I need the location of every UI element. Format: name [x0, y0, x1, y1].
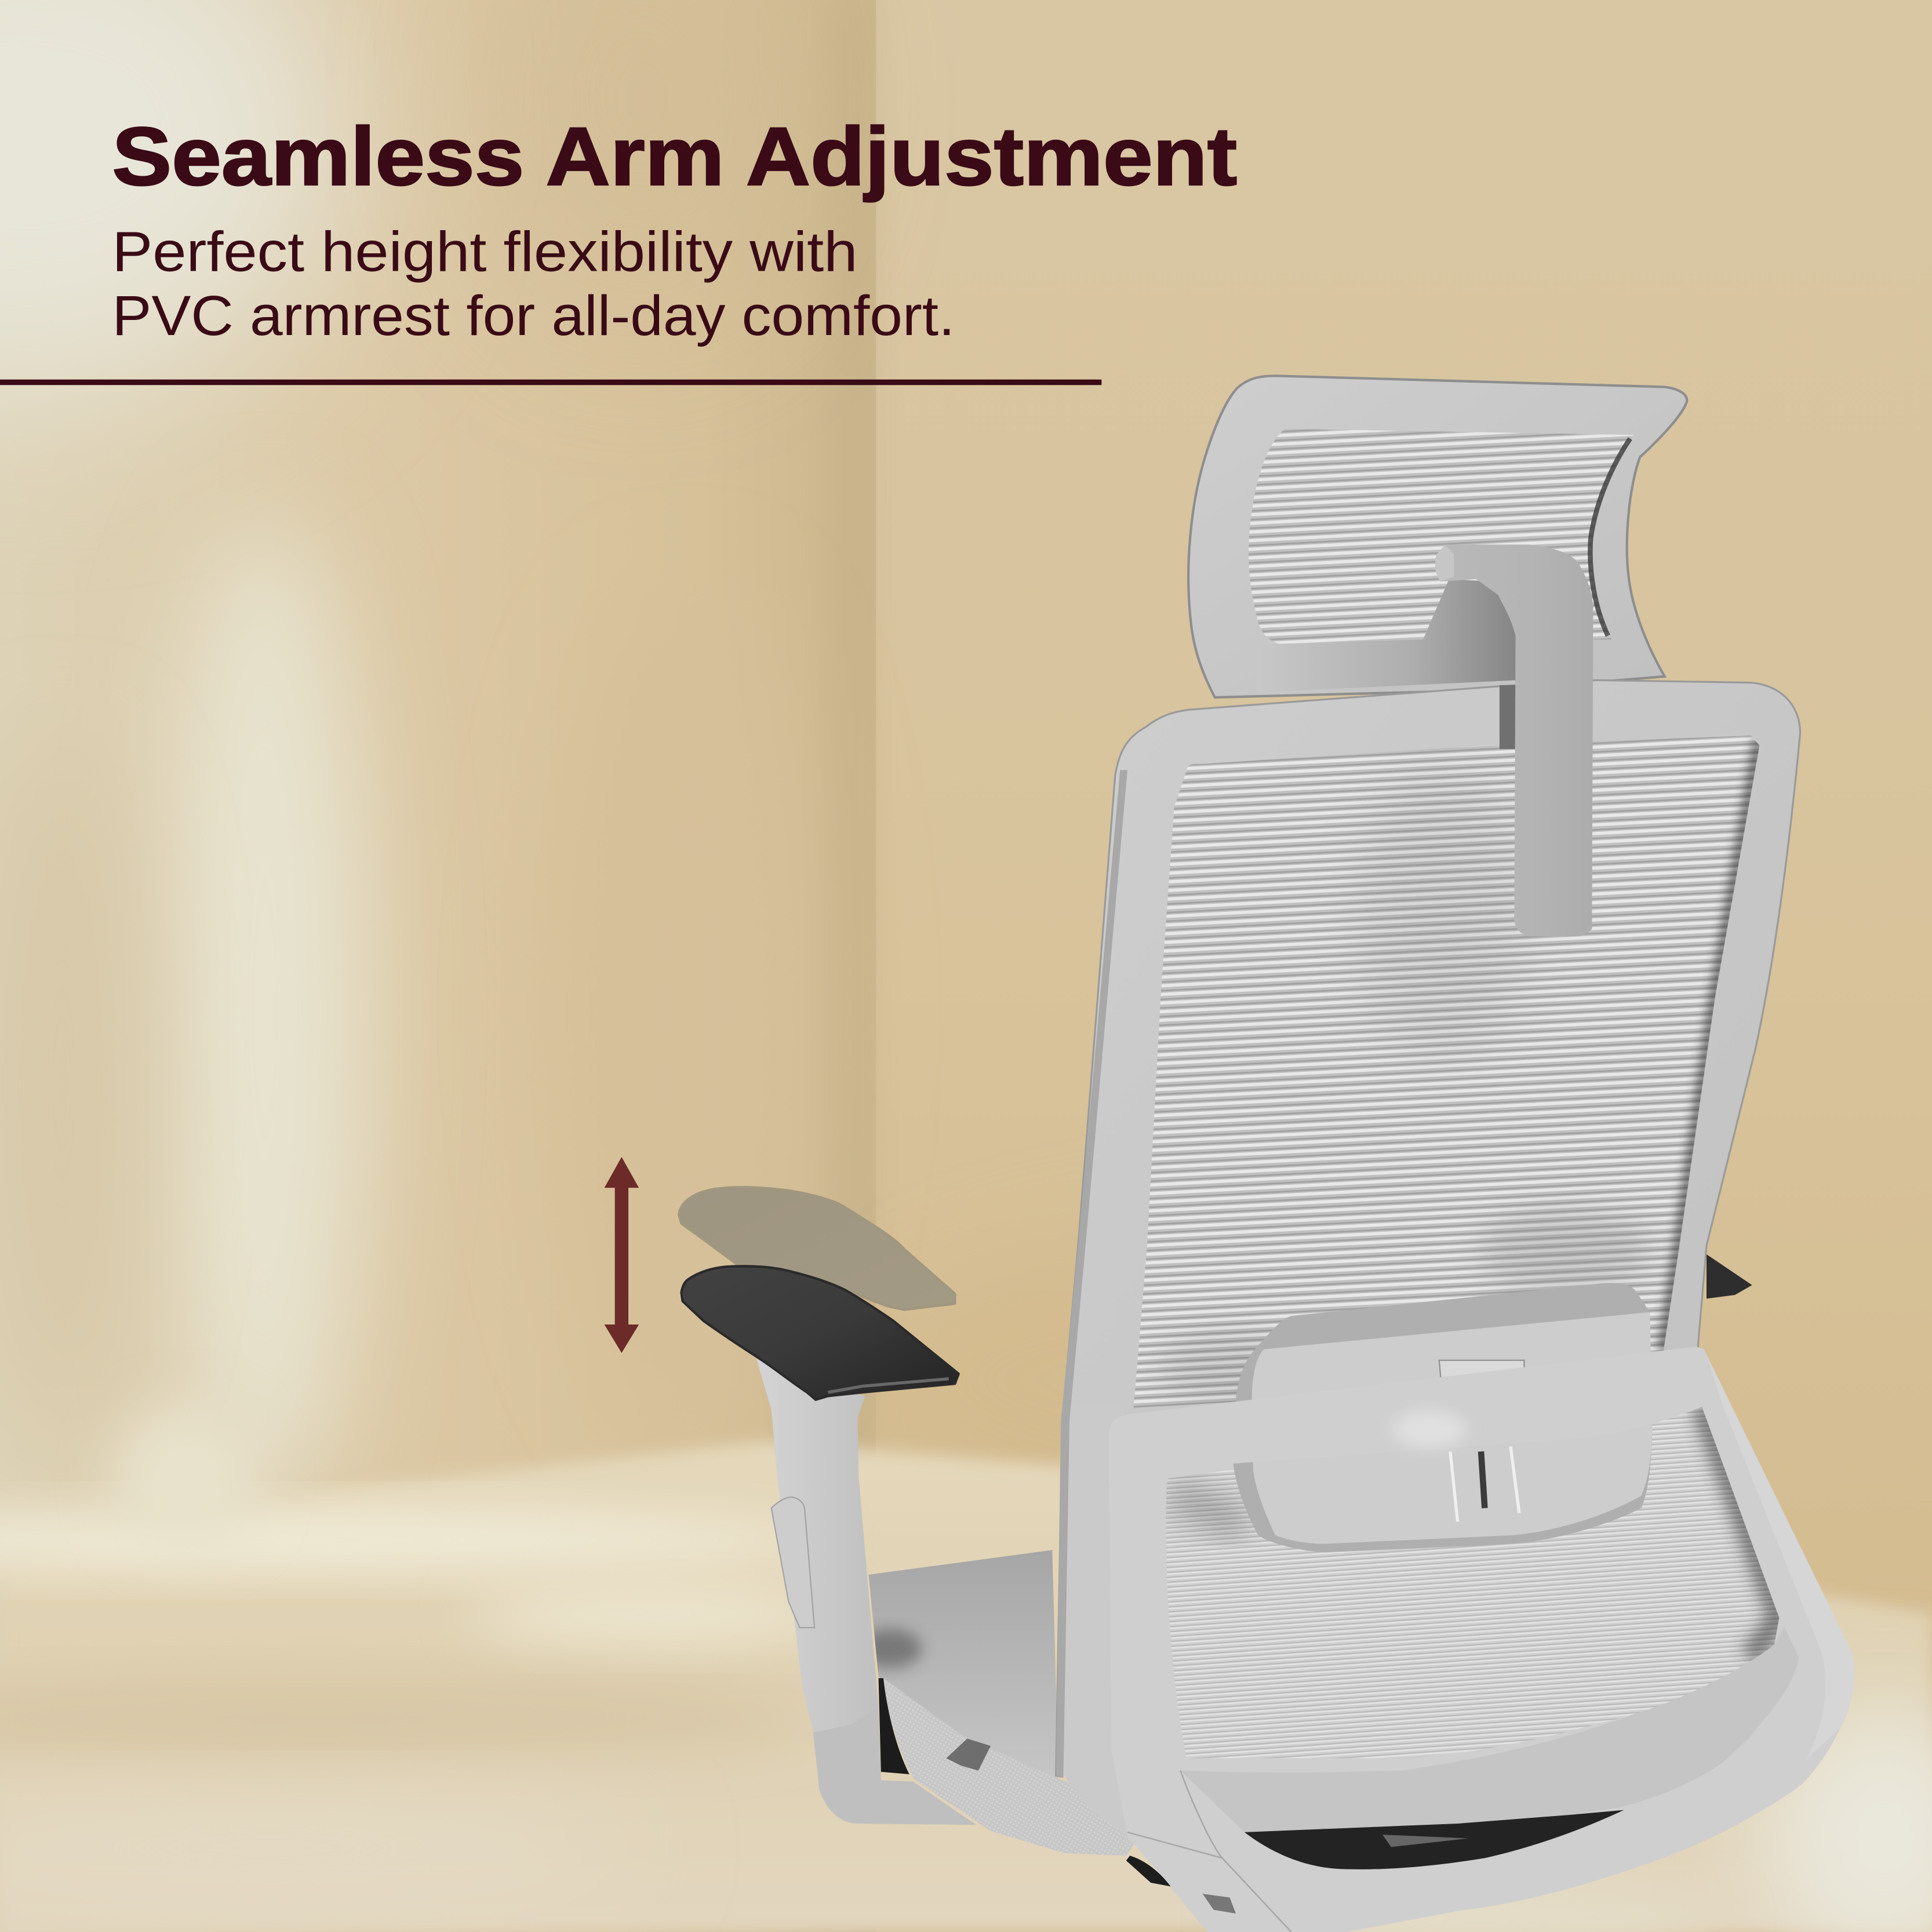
seat tag — [946, 1738, 991, 1771]
frame left side panel — [1057, 1405, 1127, 1832]
headrest post bracket — [1435, 545, 1593, 936]
title: Seamless Arm Adjustment — [112, 111, 1237, 203]
headrest mesh — [1249, 429, 1634, 645]
black underside of chair — [1126, 1810, 1624, 1913]
lower back mesh — [1166, 1406, 1779, 1758]
headrest lower shaded band — [1257, 579, 1517, 693]
headrest — [1188, 376, 1687, 697]
rim bright edge — [1707, 1355, 1854, 1759]
black armrest pad — [681, 1266, 959, 1400]
lower frame band — [1180, 1627, 1799, 1832]
frame crossbar over lumbar — [1109, 1347, 1710, 1485]
heading rule — [0, 380, 1101, 385]
headrest mesh dark edge — [1590, 439, 1630, 636]
crossbar highlight — [1392, 1411, 1467, 1448]
chair — [679, 376, 1854, 1932]
lumbar slider — [1439, 1360, 1524, 1387]
backrest frame — [1056, 680, 1800, 1777]
arm post — [756, 1359, 976, 1825]
rim seam lines — [1127, 1771, 1291, 1932]
arrow: height adjustment — [605, 1157, 639, 1353]
subtitle: PVC armrest for all-day comfort. — [112, 283, 955, 347]
lumbar adjustment slot — [1450, 1446, 1519, 1522]
subtitle — [112, 220, 955, 347]
backrest mesh — [1134, 736, 1759, 1409]
lower back loop frame — [1109, 1347, 1854, 1932]
lumbar support — [1234, 1283, 1652, 1552]
arm slider button — [772, 1497, 814, 1628]
ghost armrest, raised position — [679, 1187, 955, 1310]
subtitle: Perfect height flexibility with — [112, 220, 857, 283]
seat front strip — [879, 1678, 1140, 1855]
far armrest tip — [1707, 1254, 1752, 1298]
frame left fabric edge — [1056, 770, 1127, 1778]
seat cushion — [857, 1550, 1058, 1779]
